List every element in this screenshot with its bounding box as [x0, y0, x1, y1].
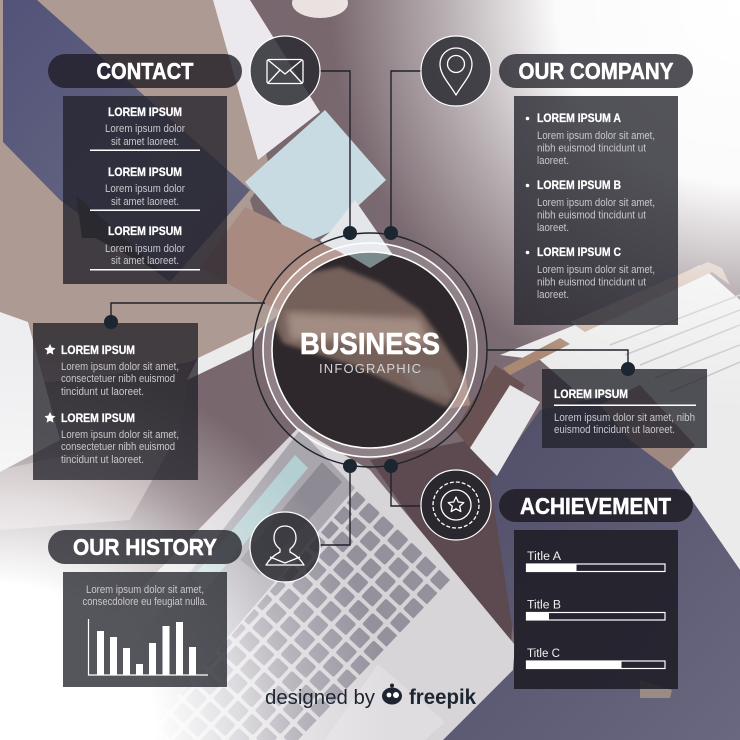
note text: Lorem ipsum dolor sit amet, nibh [554, 412, 695, 424]
handshake inside circle [275, 250, 467, 407]
credit: designed by freepik: designed by [265, 687, 375, 709]
tan tab under achievement panel [640, 680, 672, 698]
left item 1: LOREM IPSUM [61, 345, 135, 357]
left item 2 [44, 412, 179, 466]
left item 1: consectetuer nibh euismod [61, 373, 175, 385]
icon: person [250, 512, 320, 582]
achievement heading: ACHIEVEMENT [520, 493, 671, 519]
contact box [63, 96, 227, 284]
hinge strip [60, 430, 355, 740]
left item 1 [44, 344, 179, 398]
watch strap [455, 365, 525, 460]
panel: left star list [33, 323, 198, 480]
panel: our company [499, 54, 693, 325]
contact item 1 [90, 107, 200, 151]
company heading: OUR COMPANY [518, 58, 674, 84]
panel: right note [542, 369, 707, 448]
contact item 2: LOREM IPSUM [108, 167, 182, 179]
note text [554, 412, 695, 436]
contact item 3: LOREM IPSUM [108, 226, 182, 238]
progress: title C: Title C [527, 648, 560, 660]
contact heading: CONTACT [96, 58, 194, 84]
left item 1: Lorem ipsum dolor sit amet, [61, 361, 179, 373]
history box [63, 572, 227, 687]
hand top [292, 0, 348, 18]
icon: freepik mascot [382, 684, 402, 704]
company item B [526, 180, 655, 234]
lower left table [0, 365, 190, 515]
left item 2: Lorem ipsum dolor sit amet, [61, 429, 179, 441]
panel: our history [48, 530, 242, 687]
left sleeve [3, 0, 250, 282]
connector: history [320, 466, 350, 545]
contact item 2: sit amet laoreet. [111, 196, 179, 208]
central circle [253, 233, 487, 467]
history heading: OUR HISTORY [73, 534, 217, 560]
company item A [526, 113, 655, 167]
company item B: nibh euismod tincidunt ut [537, 210, 646, 222]
right hand [600, 385, 695, 470]
credit: designed by freepik: freepik [409, 686, 476, 709]
paper lines [610, 295, 740, 392]
right sleeve [443, 395, 740, 740]
history heading [48, 530, 242, 564]
keyboard keys [140, 490, 450, 740]
contact item 3: Lorem ipsum dolor [105, 243, 185, 255]
subtitle: INFOGRAPHIC [319, 361, 421, 376]
white wedge left [187, 327, 263, 380]
touchpad [325, 664, 445, 740]
note heading: LOREM IPSUM [554, 389, 628, 401]
papers right [500, 265, 740, 570]
connector: contact [320, 71, 350, 233]
progress: title C [526, 648, 665, 669]
contact item 3 [90, 226, 200, 270]
connector: left panel [111, 303, 265, 322]
progress: title A [526, 551, 665, 572]
ruler [213, 0, 320, 160]
light blue card [245, 110, 386, 245]
company item A: LOREM IPSUM A [537, 113, 621, 125]
icon: achievement badge [421, 470, 491, 540]
dark phone [76, 195, 165, 275]
contact item 1: LOREM IPSUM [108, 107, 182, 119]
company item B: LOREM IPSUM B [537, 180, 621, 192]
progress: title B: Title B [527, 600, 561, 612]
connector: achievement [391, 466, 421, 506]
company item C: Lorem ipsum dolor sit amet, [537, 264, 655, 276]
connector: company [391, 71, 421, 233]
progress: title B [526, 600, 665, 620]
left item 2: tincidunt ut laoreet. [61, 454, 144, 466]
company item B: laoreet. [537, 222, 569, 234]
white cuff [470, 385, 540, 476]
company item B: Lorem ipsum dolor sit amet, [537, 197, 655, 209]
company item A: nibh euismod tincidunt ut [537, 142, 646, 154]
company box [514, 96, 678, 325]
connector: right panel [487, 350, 628, 369]
achievement box [514, 530, 678, 689]
contact item 2 [90, 167, 200, 211]
contact item 1: sit amet laoreet. [111, 136, 179, 148]
company item C [526, 247, 655, 301]
darker wood between laptop and sleeve [370, 440, 520, 660]
history text [82, 584, 208, 608]
connector dots [104, 226, 635, 473]
history text: consecdolore eu feugiat nulla. [82, 596, 208, 608]
laptop body [60, 428, 515, 740]
left item 1: tincidunt ut laoreet. [61, 386, 144, 398]
icon: location pin [421, 36, 491, 106]
company heading [499, 54, 693, 88]
history text: Lorem ipsum dolor sit amet, [86, 584, 204, 596]
panel: achievement [499, 489, 693, 689]
company item C: LOREM IPSUM C [537, 247, 621, 259]
left box [33, 323, 198, 480]
left item 2: consectetuer nibh euismod [61, 441, 175, 453]
achievement heading [499, 489, 693, 522]
company item C: nibh euismod tincidunt ut [537, 276, 646, 288]
company item A: Lorem ipsum dolor sit amet, [537, 130, 655, 142]
company item A: laoreet. [537, 155, 569, 167]
contact item 2: Lorem ipsum dolor [105, 183, 185, 195]
title: BUSINESS [300, 326, 440, 361]
icon: envelope [250, 36, 320, 106]
clipboard edge [570, 262, 730, 332]
note text: euismod tincidunt ut laoreet. [554, 424, 675, 436]
left item 2: LOREM IPSUM [61, 413, 135, 425]
contact heading [48, 54, 242, 88]
table top left [0, 0, 285, 390]
bar chart [88, 619, 208, 675]
contact item 3: sit amet laoreet. [111, 255, 179, 267]
contact item 1: Lorem ipsum dolor [105, 123, 185, 135]
white document left [0, 312, 60, 472]
credit: designed by freepik [265, 684, 476, 709]
panel: contact [48, 54, 242, 284]
progress: title A: Title A [527, 551, 561, 563]
company item C: laoreet. [537, 289, 569, 301]
shaking hands arm [200, 207, 470, 412]
note box [542, 369, 707, 448]
